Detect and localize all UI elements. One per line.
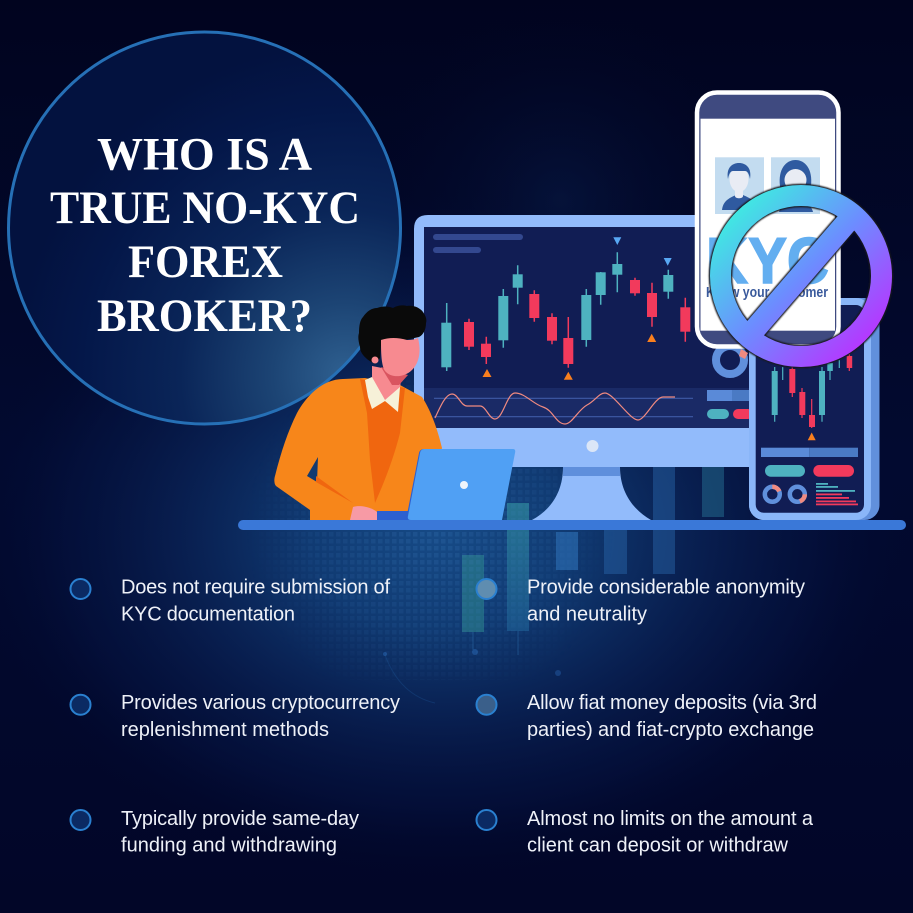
item: fiat deposits [476, 692, 817, 741]
laptop [377, 449, 515, 520]
item: cryptocurrency methods: Provides various cryptocurrency [121, 692, 400, 714]
item: anonymity [476, 576, 805, 626]
item: anonymity: and neutrality [527, 604, 647, 626]
ID photo: man [715, 157, 764, 214]
phone with trading app [749, 298, 880, 520]
phone bars [816, 483, 858, 505]
title: BROKER? [97, 290, 312, 342]
phone candles [772, 354, 852, 440]
collar [365, 377, 400, 412]
title: FOREX [128, 236, 283, 288]
neck [372, 366, 402, 402]
candlestick chart [441, 237, 690, 380]
indicator panel [424, 388, 700, 428]
KYC phone [697, 92, 838, 346]
list left column [70, 576, 400, 857]
item: no KYC documentation: Does not require submission of [121, 576, 390, 598]
item: cryptocurrency methods: replenishment methods [121, 719, 329, 741]
monitor side widgets [707, 346, 753, 419]
vest [360, 379, 405, 503]
phone donuts [765, 487, 805, 502]
item: cryptocurrency methods [70, 692, 400, 741]
oscillator line [434, 393, 693, 424]
hand [350, 506, 382, 520]
item: no limits: Almost no limits on the amount a [527, 808, 814, 830]
sweater [274, 378, 442, 520]
desktop monitor [414, 215, 759, 520]
person at laptop [274, 305, 515, 520]
hair [358, 305, 426, 364]
item: same-day funding: Typically provide same-day [121, 808, 359, 830]
item: no KYC documentation: KYC documentation [121, 604, 295, 626]
item: fiat deposits: Allow fiat money deposits (via 3rd [527, 692, 817, 714]
title [50, 128, 360, 342]
title: TRUE NO-KYC [50, 182, 360, 234]
monitor body [414, 215, 759, 467]
monitor stand [532, 467, 651, 520]
dotted world map texture [329, 469, 522, 640]
item: same-day funding [70, 808, 359, 857]
title: WHO IS A [97, 128, 312, 180]
KYC label: KYC [706, 224, 829, 297]
background candlesticks [383, 467, 724, 703]
item: no limits [476, 808, 814, 857]
KYC label: Know your customer [706, 284, 828, 301]
item: no limits: client can deposit or withdraw [527, 835, 789, 857]
item: no KYC documentation [70, 576, 390, 626]
item: fiat deposits: parties) and fiat-crypto exchange [527, 719, 814, 741]
ID photo: woman [771, 157, 820, 214]
item: anonymity: Provide considerable anonymity [527, 576, 805, 598]
item: same-day funding: funding and withdrawing [121, 835, 337, 857]
title circle [8, 32, 400, 424]
list right column [476, 576, 817, 857]
prohibition sign [720, 196, 882, 356]
desk [238, 520, 906, 530]
face [381, 338, 420, 376]
